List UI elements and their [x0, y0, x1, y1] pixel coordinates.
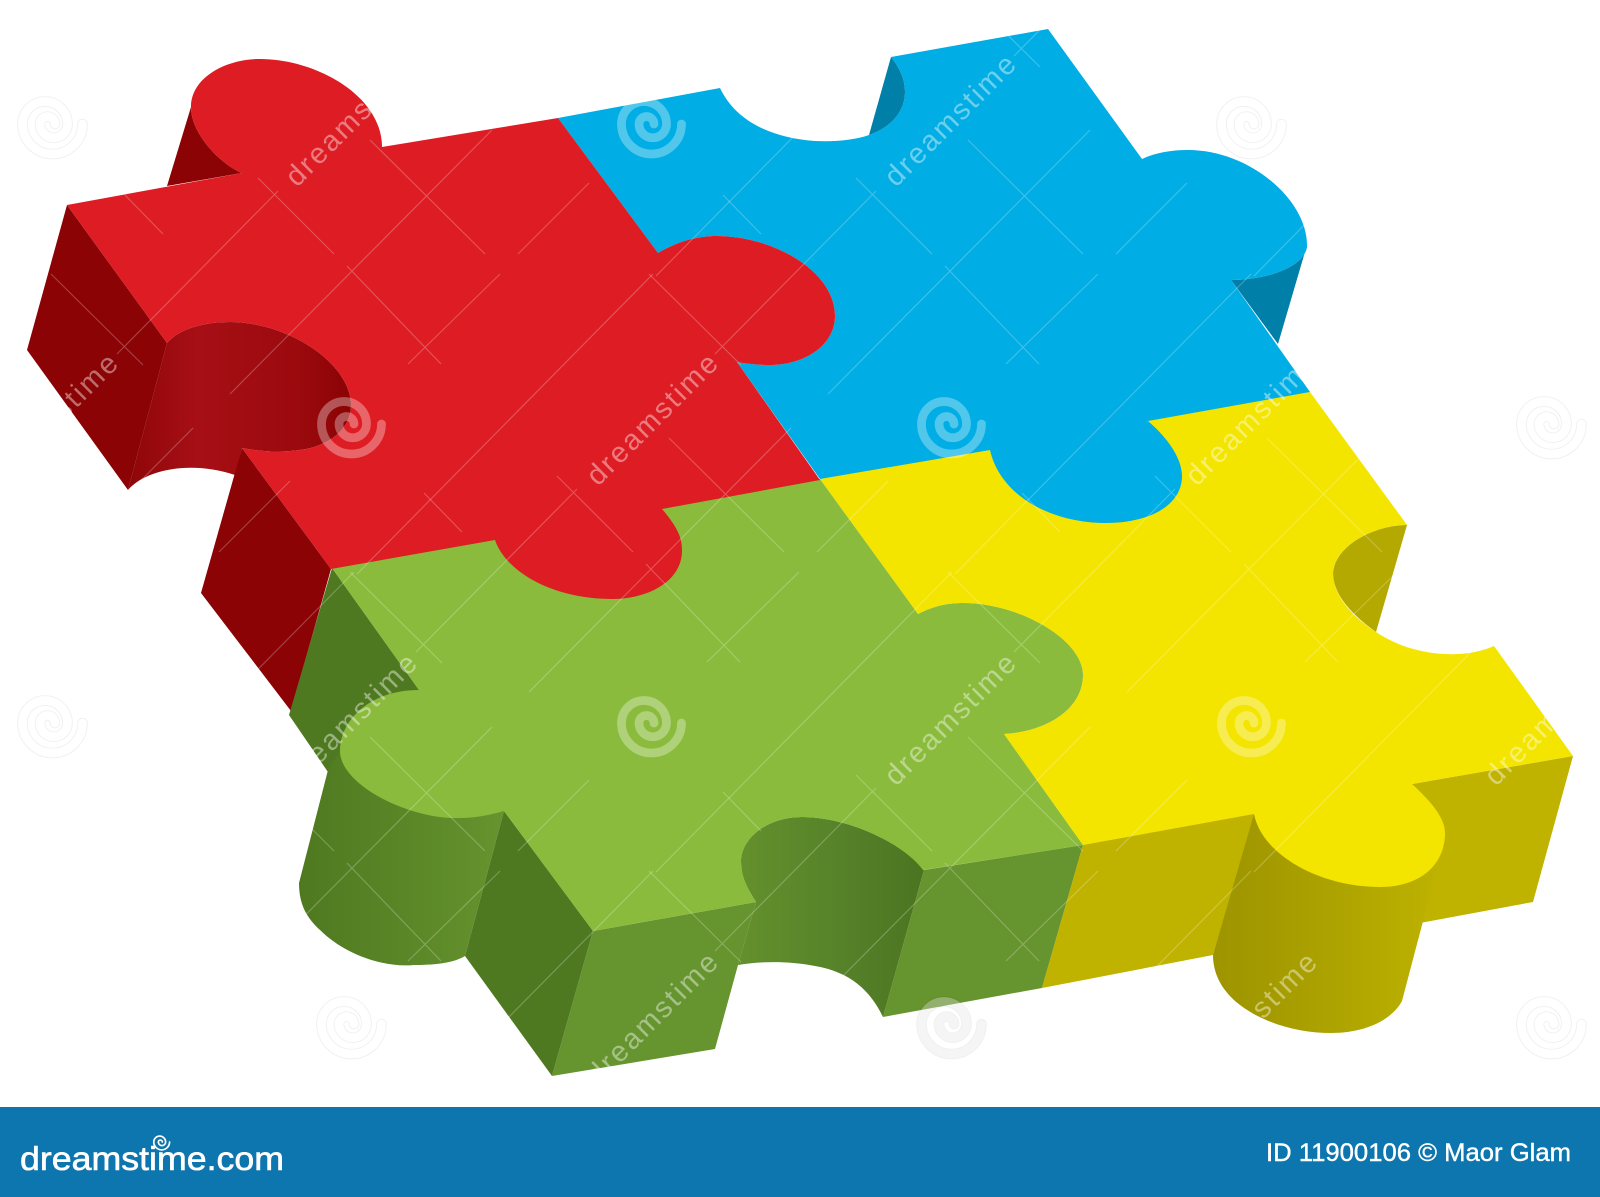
blue tab side: [1231, 245, 1307, 344]
red lower side: [201, 448, 331, 711]
footer bar: [0, 1107, 1600, 1197]
watermark: dreamstime text: dreamstime: [279, 648, 424, 792]
green right front side: [883, 845, 1083, 1017]
green front side: [552, 902, 756, 1076]
footer credit text: ID 11900106 © Maor Glam: [1266, 1139, 1571, 1167]
blue notch wall: [869, 57, 905, 135]
watermark: dreamstime text: dreamstime: [580, 947, 725, 1091]
top face: blue: [558, 29, 1310, 523]
watermark: dreamstime text: dreamstime: [878, 49, 1023, 193]
red tab side: [167, 107, 242, 186]
puzzle piece: blue sides: [869, 57, 1307, 344]
green tab wall: [299, 751, 504, 965]
green dark corner side: [465, 811, 593, 1076]
watermark: dreamstime text: dreamstime: [1179, 947, 1324, 1091]
top face: red: [67, 59, 835, 599]
yellow left front side: [1042, 800, 1260, 988]
watermark: dreamstime text: dreamstime: [1179, 348, 1324, 492]
yellow tab wall: [1213, 814, 1437, 1033]
green notch wall: [738, 817, 924, 1017]
yellow notch wall: [1333, 525, 1407, 632]
red left side: [27, 205, 167, 490]
top face: yellow: [820, 392, 1573, 887]
puzzle piece: yellow sides: [1042, 525, 1573, 1033]
watermark: dreamstime text: dreamstime: [878, 648, 1023, 792]
red notch wall: [128, 322, 351, 490]
top face: green: [332, 479, 1083, 931]
yellow right front side: [1412, 756, 1573, 923]
watermark: spirals: [22, 102, 1582, 1054]
footer logo spiral: [154, 1136, 170, 1150]
puzzle piece: red: [27, 107, 351, 711]
green upper side: [289, 568, 419, 775]
watermark: dreamstime text: dreamstime: [279, 49, 424, 193]
watermark: dreamstime text: dreamstime: [580, 348, 725, 492]
footer logo text: dreamstime.com: [20, 1140, 284, 1177]
puzzle piece: green sides: [289, 568, 1083, 1076]
